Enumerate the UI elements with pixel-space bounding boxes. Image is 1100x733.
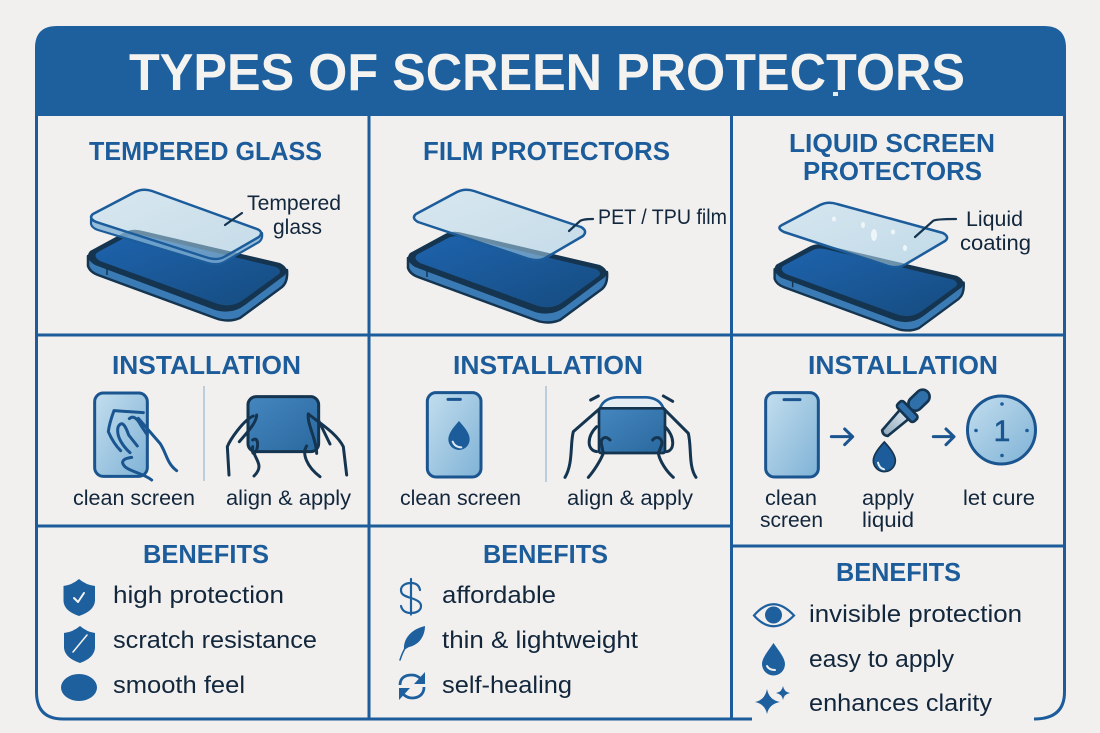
text: high protection: high protection xyxy=(113,582,284,609)
text: self-healing: self-healing xyxy=(442,672,572,699)
illustration: phone with tempered glass xyxy=(88,190,287,320)
heading: film protectors: FILM PROTECTORS xyxy=(423,138,670,166)
label: apply liquid: liquid xyxy=(862,509,914,532)
icon: shield with check xyxy=(64,579,95,616)
icon: refresh arrows xyxy=(399,672,425,700)
heading: benefits: BENEFITS xyxy=(143,541,269,569)
icon: phone xyxy=(766,393,818,477)
icon: feather xyxy=(400,626,425,660)
heading: tempered glass: TEMPERED GLASS xyxy=(89,138,322,166)
heading: benefits: BENEFITS xyxy=(483,541,608,569)
callout: tempered glass: glass xyxy=(273,216,322,239)
icon: hands applying film xyxy=(565,396,696,477)
label: align and apply: align & apply xyxy=(226,487,352,510)
divider xyxy=(545,386,547,482)
icon: curing clock xyxy=(968,396,1036,464)
heading: benefits: BENEFITS xyxy=(836,559,961,587)
icon: phone with water drop xyxy=(427,393,481,477)
text: affordable: affordable xyxy=(442,582,556,609)
callout: tempered glass: Tempered xyxy=(247,192,341,215)
label: align and apply: align & apply xyxy=(567,487,694,510)
heading: installation: INSTALLATION xyxy=(112,352,301,380)
arrow: step two to three xyxy=(933,429,954,445)
icon: smooth blob xyxy=(61,674,97,701)
panel: installation, liquid xyxy=(760,352,1036,532)
icon: dropper and droplet xyxy=(873,383,936,472)
title: TYPES OF SCREEN PROTECTORS xyxy=(129,44,965,102)
panel: installation, tempered glass xyxy=(73,352,352,510)
heading: liquid screen protectors xyxy=(789,130,995,186)
illustration: phone with film xyxy=(408,190,607,322)
icon: curing clock: 1 xyxy=(994,415,1010,448)
label: clean screen xyxy=(760,487,823,532)
panel: installation, film xyxy=(400,352,696,510)
callout: liquid coating xyxy=(915,208,1031,255)
label: let cure: let cure xyxy=(963,487,1035,510)
panel: benefits, liquid xyxy=(753,559,1033,724)
text: invisible protection: invisible protection xyxy=(809,601,1022,628)
panel: film protectors xyxy=(408,138,727,322)
arrow: step one to two xyxy=(831,429,853,445)
label: clean screen: clean xyxy=(765,487,817,510)
header banner xyxy=(35,26,1066,116)
panel: liquid screen protectors xyxy=(774,130,1031,330)
icon: dollar sign xyxy=(401,579,421,614)
heading: liquid screen protectors: PROTECTORS xyxy=(803,158,982,186)
icon: wiping the screen xyxy=(95,393,177,480)
panel: benefits, tempered glass xyxy=(61,541,317,701)
mask behind last row xyxy=(753,712,1033,724)
callout: liquid coating: Liquid xyxy=(966,208,1023,231)
callout: tempered glass xyxy=(225,192,341,239)
label: clean screen: clean screen xyxy=(73,487,195,510)
icon: shield with scratch xyxy=(64,626,95,663)
callout: liquid coating: coating xyxy=(960,232,1031,255)
text: scratch resistance: scratch resistance xyxy=(113,627,317,654)
divider xyxy=(203,386,205,481)
heading: installation: INSTALLATION xyxy=(808,352,998,380)
panel: benefits, film xyxy=(399,541,638,700)
text: thin and lightweight: thin & lightweight xyxy=(442,627,638,654)
heading: installation: INSTALLATION xyxy=(453,352,643,380)
frame and grid xyxy=(36,100,1065,719)
icon: sparkles xyxy=(755,686,790,714)
panel: tempered glass xyxy=(88,138,341,320)
label: apply liquid xyxy=(862,487,915,532)
illustration: phone with liquid coating xyxy=(774,203,964,330)
label: clean screen: clean screen xyxy=(400,487,521,510)
label: apply liquid: apply xyxy=(862,487,915,510)
label: clean screen: screen xyxy=(760,509,823,532)
icon: eye xyxy=(754,604,794,626)
icon: drop xyxy=(762,643,785,676)
callout: PET / TPU film: PET / TPU film xyxy=(598,206,727,229)
text: smooth feel: smooth feel xyxy=(113,672,245,699)
text: enhances clarity: enhances clarity xyxy=(809,690,992,717)
heading: liquid screen protectors: LIQUID SCREEN xyxy=(789,130,995,158)
icon: hands aligning protector xyxy=(227,397,347,477)
text: easy to apply: easy to apply xyxy=(809,646,954,673)
